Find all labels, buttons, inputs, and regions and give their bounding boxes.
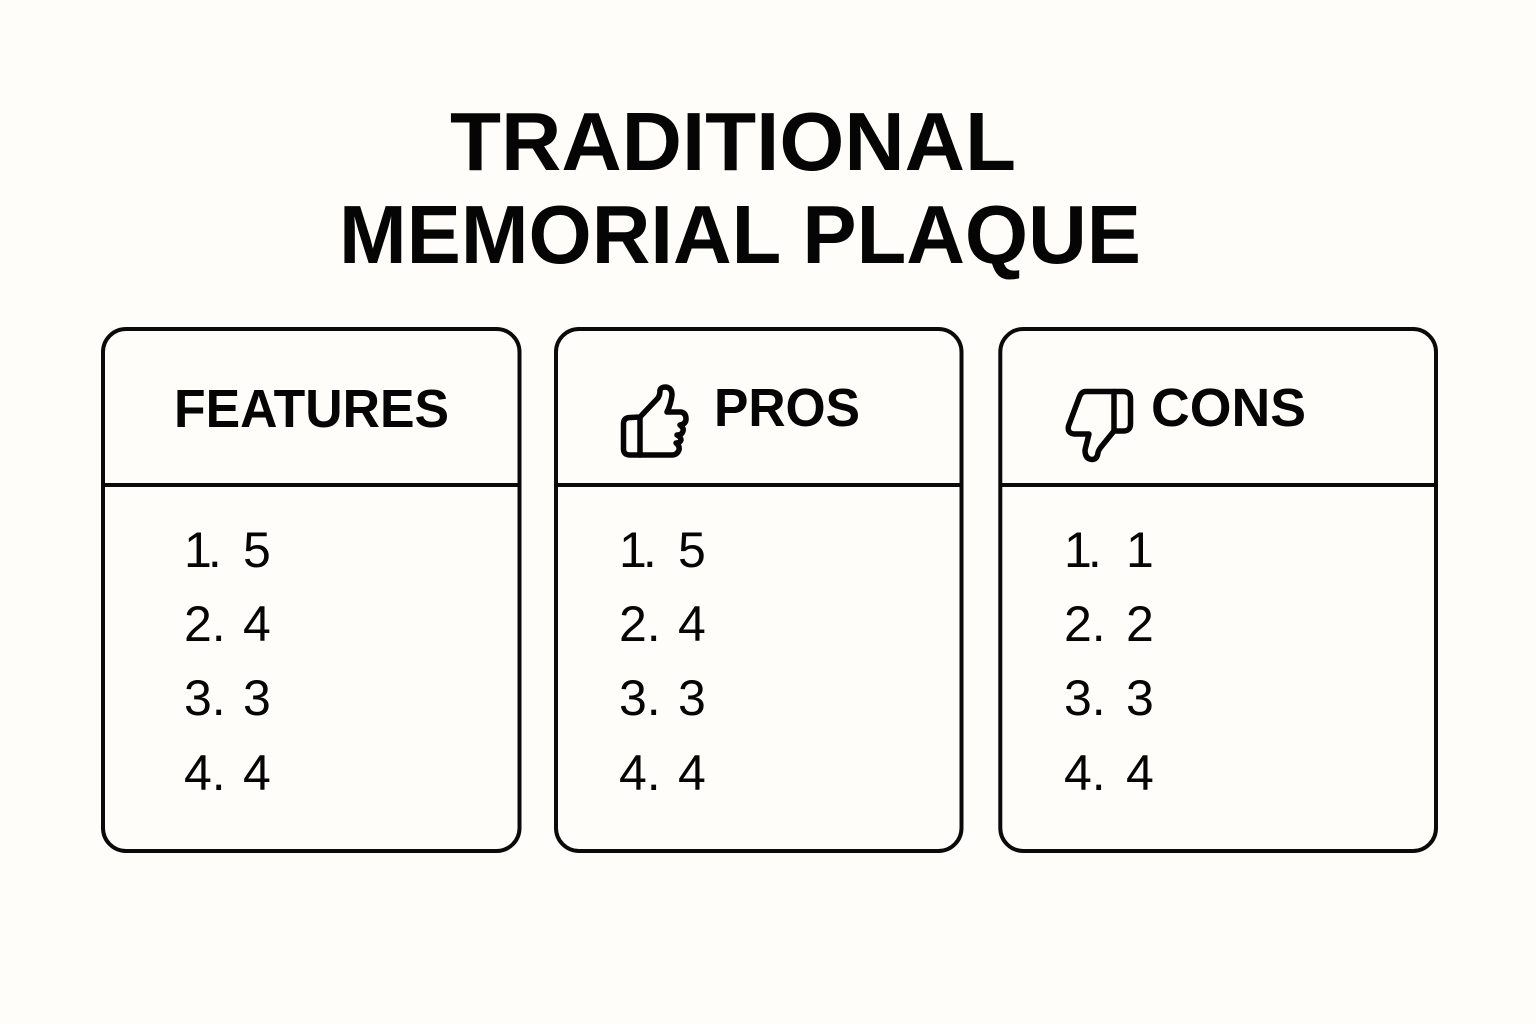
list: cons: 2. bbox=[1064, 596, 1106, 652]
panel: features bbox=[103, 329, 520, 851]
list: cons: 1. bbox=[1064, 522, 1102, 578]
list: cons: 4 bbox=[1126, 745, 1154, 801]
list: features: 3. bbox=[184, 670, 226, 726]
list: pros: 3 bbox=[678, 670, 706, 726]
title bbox=[339, 95, 1141, 281]
list: pros: 5 bbox=[678, 522, 706, 578]
list: features: 3 bbox=[243, 670, 271, 726]
icon: thumbs up bbox=[624, 387, 686, 455]
heading: cons: CONS bbox=[1151, 378, 1306, 438]
title: MEMORIAL PLAQUE bbox=[339, 188, 1141, 281]
panel: cons bbox=[1000, 329, 1436, 851]
list: pros: 2. bbox=[619, 596, 661, 652]
heading: features: FEATURES bbox=[174, 379, 449, 439]
list: pros: 1. bbox=[619, 522, 657, 578]
list: cons: 3 bbox=[1126, 670, 1154, 726]
panel: pros bbox=[556, 329, 962, 851]
list: features bbox=[184, 522, 271, 801]
list: cons: 4. bbox=[1064, 745, 1106, 801]
list: features: 4 bbox=[243, 745, 271, 801]
list: features: 1. bbox=[184, 522, 222, 578]
list: cons bbox=[1064, 522, 1154, 801]
list: pros: 3. bbox=[619, 670, 661, 726]
title: TRADITIONAL bbox=[450, 95, 1016, 188]
list: pros: 4 bbox=[678, 745, 706, 801]
list: cons: 1 bbox=[1126, 522, 1154, 578]
list: pros bbox=[619, 522, 706, 801]
list: cons: 2 bbox=[1126, 596, 1154, 652]
list: pros: 4 bbox=[678, 596, 706, 652]
list: cons: 3. bbox=[1064, 670, 1106, 726]
icon: thumbs down bbox=[1068, 392, 1130, 460]
list: features: 2. bbox=[184, 596, 226, 652]
list: features: 5 bbox=[243, 522, 271, 578]
list: features: 4 bbox=[243, 596, 271, 652]
heading: pros: PROS bbox=[714, 378, 860, 438]
list: features: 4. bbox=[184, 745, 226, 801]
list: pros: 4. bbox=[619, 745, 661, 801]
